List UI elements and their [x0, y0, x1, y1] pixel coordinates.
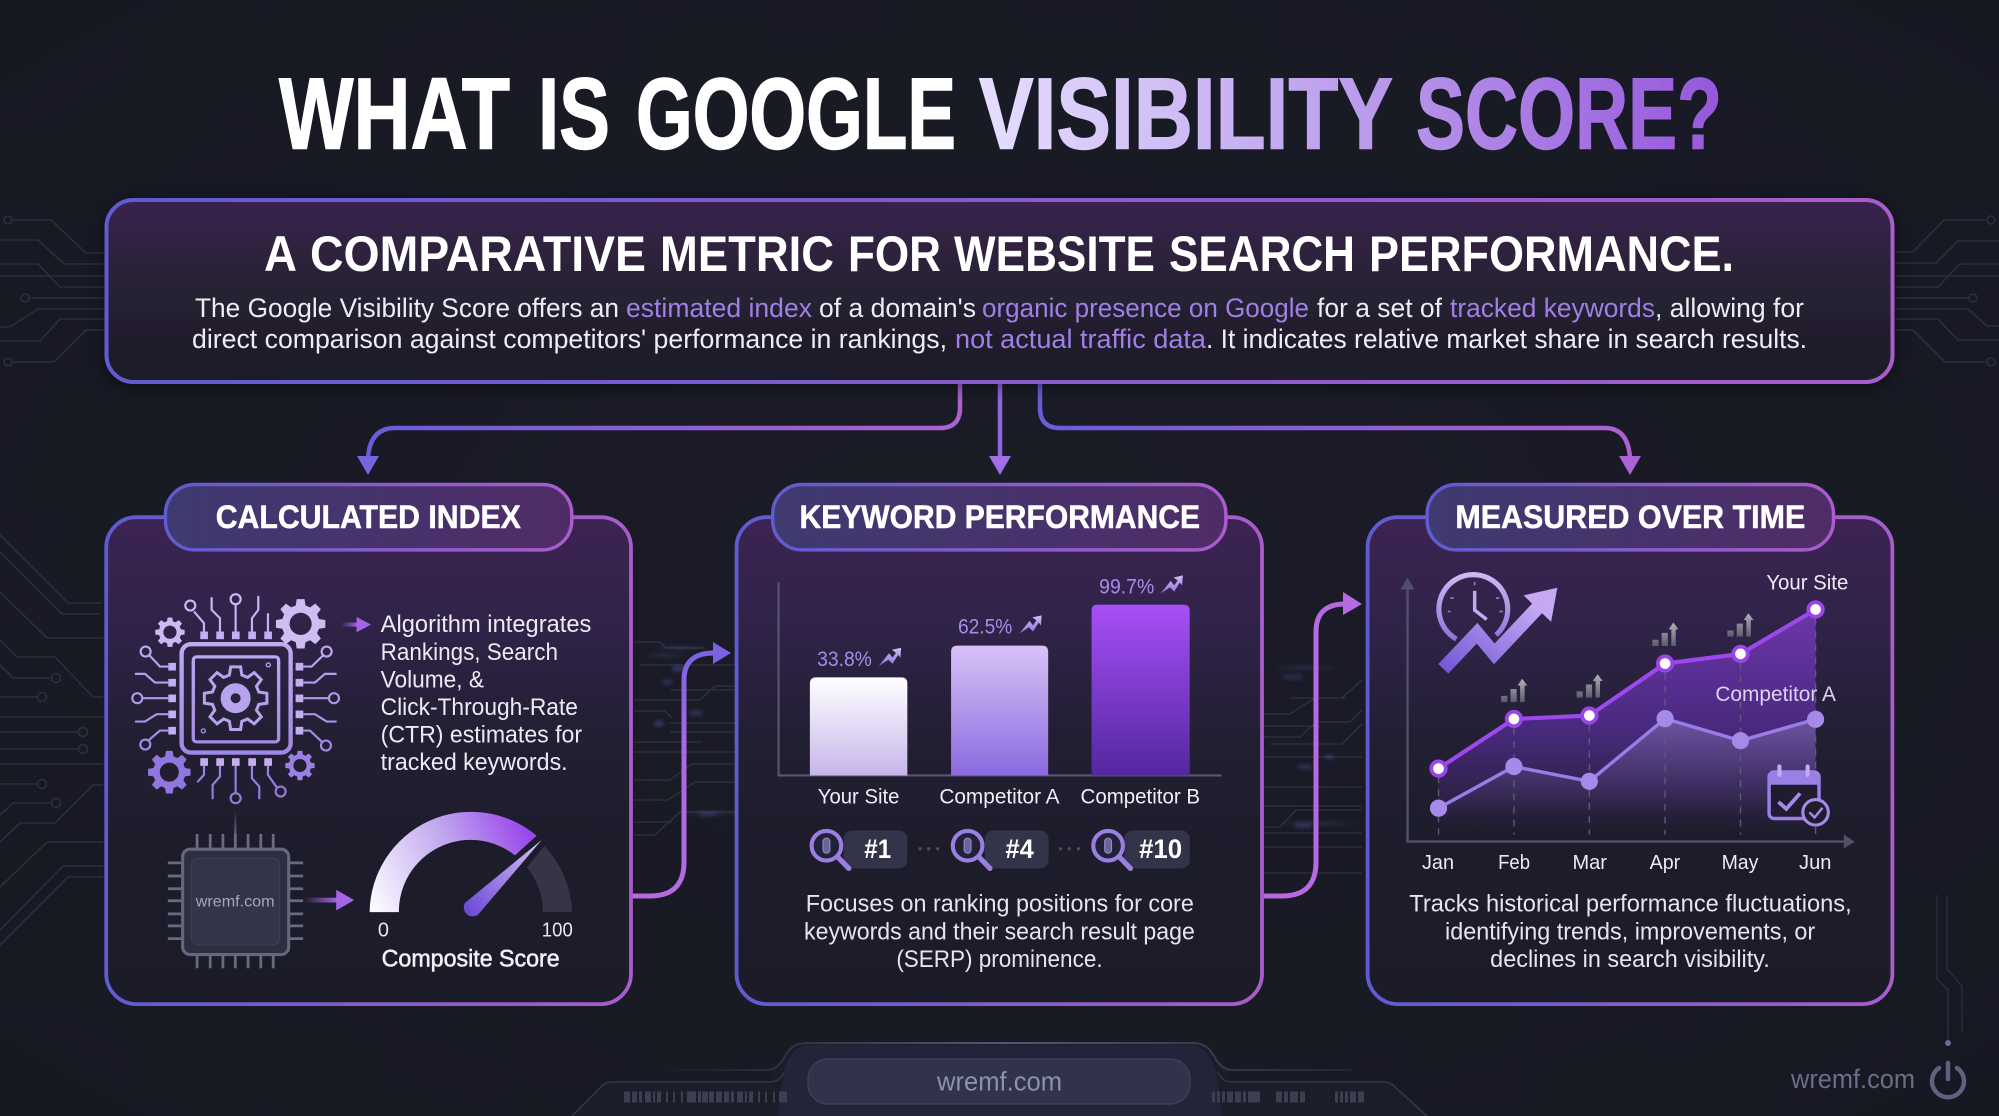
- summary heading: PERFORMANCE.: [1369, 226, 1734, 282]
- corner brand: wremf.com: [1790, 1064, 1915, 1094]
- rank: #1: [812, 831, 907, 868]
- arrow: chip to gauge: [303, 890, 354, 910]
- panel: summary: [106, 200, 1892, 382]
- gear: centre outline: [204, 667, 267, 729]
- line chart: Competitor A: [1715, 683, 1836, 706]
- line chart: Jan: [1422, 852, 1454, 874]
- text: algorithm: Algorithm integrates: [381, 611, 591, 638]
- rank row: [812, 831, 1190, 868]
- arrow: to calculated index: [357, 382, 960, 475]
- summary paragraph: [192, 293, 1807, 354]
- icon: wremf chip: [168, 811, 303, 968]
- bar: competitor b: [1092, 605, 1190, 775]
- arrow: to measured over time: [1040, 382, 1641, 475]
- glow specks between panels: [640, 646, 1365, 828]
- gauge: [370, 812, 573, 973]
- side connector arrows between cards: [632, 592, 1362, 896]
- title: VISIBILITY: [979, 58, 1393, 170]
- line chart: May: [1722, 852, 1758, 874]
- icon: power: [1932, 1063, 1964, 1097]
- summary heading: A: [264, 226, 297, 282]
- summary paragraph: of a domain's: [819, 293, 976, 323]
- line: competitor a: [1430, 710, 1824, 817]
- bar chart: 62.5%: [958, 615, 1012, 639]
- rank: #1: #1: [864, 834, 891, 864]
- summary heading: COMPARATIVE: [310, 226, 646, 282]
- arrow: to keyword performance: [989, 382, 1011, 475]
- summary heading: WEBSITE: [954, 226, 1155, 282]
- gear: bottom left: [148, 751, 191, 793]
- heading pill: keyword performance: KEYWORD PERFORMANCE: [800, 498, 1200, 535]
- bar chart: Competitor A: [939, 784, 1060, 809]
- bar chart: 33.8%: [817, 647, 872, 671]
- gear: small top left: [155, 617, 185, 647]
- panel: calculated index: [106, 484, 631, 1004]
- summary paragraph: The Google Visibility Score offers an: [195, 293, 619, 323]
- bar chart: 99.7%: [1099, 575, 1154, 599]
- text: time description: Tracks historical performance fluctuations,: [1409, 890, 1852, 917]
- rank: #4: #4: [1005, 834, 1034, 864]
- bar chart: Your Site: [818, 784, 899, 809]
- text: keyword description: [804, 890, 1195, 973]
- gauge: 0: [378, 920, 389, 942]
- bar chart: [779, 575, 1221, 809]
- icon: clock with rising arrow: [1439, 575, 1557, 669]
- bar chart: Competitor B: [1081, 784, 1200, 809]
- title: SCORE?: [1416, 58, 1722, 170]
- rank: #10: #10: [1139, 834, 1182, 864]
- title: WHAT: [279, 58, 510, 170]
- line: your site: [1431, 602, 1823, 776]
- text: keyword description: (SERP) prominence.: [896, 946, 1103, 973]
- line chart: Feb: [1498, 852, 1530, 874]
- summary heading: [264, 226, 1734, 282]
- arrow: keyword to time: [1263, 592, 1362, 896]
- icon: processor with gears: [132, 594, 339, 803]
- text: algorithm: Volume, &: [381, 666, 484, 693]
- line chart: Apr: [1650, 852, 1681, 874]
- bar: your site: [810, 677, 907, 775]
- icon: calendar with check: [1769, 766, 1828, 825]
- text: algorithm: Click-Through-Rate: [381, 694, 578, 721]
- heading pill: measured over time: MEASURED OVER TIME: [1455, 498, 1805, 535]
- line chart: [1401, 572, 1855, 874]
- trace above power icon: [1937, 895, 1962, 1046]
- summary paragraph: organic presence on Google: [982, 293, 1309, 323]
- gear: small bottom right: [285, 751, 315, 780]
- title: [279, 58, 1722, 170]
- footer url pill: [808, 1059, 1190, 1104]
- summary paragraph: not actual traffic data: [955, 324, 1206, 354]
- text: time description: declines in search visibility.: [1490, 946, 1770, 973]
- heading pill: measured over time: [1427, 484, 1833, 550]
- summary paragraph: for a set of: [1317, 293, 1443, 323]
- text: time description: [1409, 890, 1852, 973]
- summary heading: FOR: [848, 226, 941, 282]
- summary paragraph: estimated index: [626, 293, 812, 323]
- text: algorithm: [381, 611, 591, 776]
- line chart: Jun: [1799, 852, 1831, 874]
- icons: small growth bars: [1501, 613, 1754, 702]
- summary heading: SEARCH: [1169, 226, 1355, 282]
- gauge: 100: [542, 920, 573, 942]
- heading pill: calculated index: CALCULATED INDEX: [216, 498, 521, 535]
- rank: #10: [1093, 831, 1190, 868]
- text: algorithm: Rankings, Search: [381, 639, 558, 666]
- summary paragraph: . It indicates relative market share in search results.: [1206, 324, 1807, 354]
- text: algorithm: tracked keywords.: [381, 749, 568, 776]
- title: IS: [538, 58, 610, 170]
- icon: wremf chip: wremf.com: [195, 893, 275, 910]
- text: algorithm: (CTR) estimates for: [381, 721, 582, 748]
- line chart: Mar: [1572, 852, 1607, 874]
- summary paragraph: tracked keywords: [1450, 293, 1655, 323]
- background circuit traces: [0, 216, 1999, 945]
- footer url pill: wremf.com: [936, 1066, 1062, 1096]
- gauge: Composite Score: [382, 946, 560, 973]
- gear: large top right: [276, 599, 325, 649]
- heading pill: keyword performance: [773, 484, 1226, 550]
- heading pill: calculated index: [165, 484, 572, 550]
- text: keyword description: Focuses on ranking positions for core: [806, 890, 1194, 917]
- corner brand: [1790, 1063, 1964, 1097]
- bar: competitor a: [951, 646, 1048, 775]
- arrow: index to keyword: [632, 642, 731, 896]
- arrow: small to text: [341, 617, 371, 632]
- text: time description: identifying trends, improvements, or: [1445, 918, 1815, 945]
- title: GOOGLE: [636, 58, 956, 170]
- rank: #4: [953, 831, 1049, 868]
- summary paragraph: , allowing for: [1655, 293, 1804, 323]
- footer plate: [572, 1043, 1427, 1116]
- panel: keyword performance: [737, 484, 1262, 1004]
- connector arrows from summary panel to cards: [357, 382, 1641, 475]
- barcode strips: [624, 1092, 1365, 1102]
- line chart: Your Site: [1766, 572, 1848, 595]
- text: keyword description: keywords and their search result page: [804, 918, 1195, 945]
- summary paragraph: direct comparison against competitors' performance in rankings,: [192, 324, 947, 354]
- summary heading: METRIC: [660, 226, 834, 282]
- panel: measured over time: [1368, 484, 1892, 1004]
